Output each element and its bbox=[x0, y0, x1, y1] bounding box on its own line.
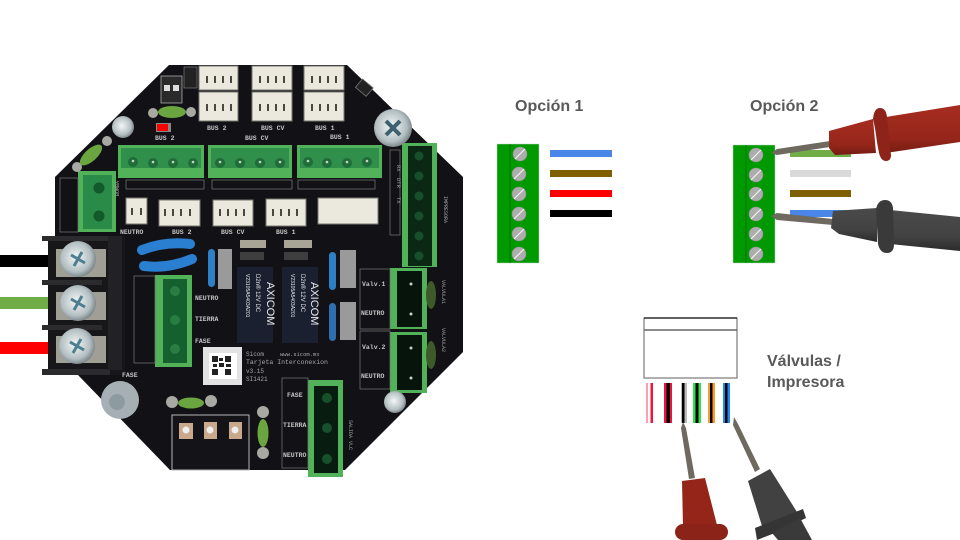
connector housing bbox=[644, 318, 737, 378]
silkscreen labels: BUS 1 bbox=[330, 134, 350, 141]
relay: left: AXICOM bbox=[264, 282, 276, 325]
red probe bbox=[675, 422, 728, 540]
silkscreen labels: DTR bbox=[395, 178, 402, 189]
silkscreen labels: SALIDA VLC bbox=[347, 420, 353, 450]
diagram: opción 2 terminal, wires and probes bbox=[733, 105, 960, 263]
silkscreen labels: Valv.1 bbox=[362, 281, 386, 288]
silkscreen labels: TIERRA bbox=[283, 422, 307, 429]
connectors: top white headers bbox=[199, 66, 344, 121]
coil: blue inductor bbox=[142, 243, 192, 267]
connector: green 4-pole row bbox=[118, 145, 382, 178]
silkscreen labels: BUS CV bbox=[221, 229, 245, 236]
qr label bbox=[203, 347, 242, 385]
small components: leds and regulators bbox=[240, 240, 312, 260]
resistors bbox=[208, 249, 336, 341]
label: válvulas / impresora: Válvulas / bbox=[767, 353, 841, 370]
silkscreen labels bbox=[115, 125, 448, 459]
silkscreen labels: NEUTRO bbox=[283, 452, 307, 459]
board outline bbox=[55, 65, 463, 470]
terminal block: power bbox=[42, 236, 125, 375]
silkscreen labels: NEUTRO bbox=[361, 310, 385, 317]
relay: right: V23105A5403A201 bbox=[289, 274, 295, 318]
silkscreen labels: BUS CV bbox=[245, 135, 269, 142]
silk outlines bbox=[60, 150, 400, 468]
relay: right bbox=[282, 267, 320, 343]
silkscreen labels: BUS CV bbox=[261, 125, 285, 132]
black probe bbox=[771, 200, 960, 253]
jumpers and small top parts bbox=[161, 67, 373, 103]
silkscreen labels: www.sicom.mx bbox=[280, 351, 320, 358]
screws bbox=[101, 109, 412, 419]
black probe bbox=[733, 417, 812, 540]
silkscreen labels: FASE bbox=[287, 392, 303, 399]
silkscreen labels: Valv.2 bbox=[362, 344, 386, 351]
label: válvulas / impresora: Impresora bbox=[767, 374, 844, 391]
silkscreen labels: BUS 2 bbox=[207, 125, 227, 132]
silkscreen labels: SI1421 bbox=[246, 376, 268, 383]
silkscreen labels: FASE bbox=[195, 338, 211, 345]
relay: left bbox=[237, 267, 276, 343]
silkscreen labels: BUS 2 bbox=[172, 229, 192, 236]
connector: green bomba bbox=[78, 171, 116, 232]
capacitors: gray bbox=[218, 249, 356, 340]
terminal: j7 bbox=[172, 415, 249, 470]
terminal strip bbox=[497, 144, 539, 263]
connector: green valvula 1 bbox=[390, 268, 427, 329]
terminal strip bbox=[733, 145, 775, 263]
fuses bbox=[72, 106, 436, 459]
silkscreen labels: Sicom bbox=[246, 351, 264, 358]
silkscreen labels: FASE bbox=[122, 372, 138, 379]
connectors: second row white headers bbox=[126, 198, 378, 226]
panel: circuit board bbox=[0, 65, 463, 477]
connector: green valvula 2 bbox=[390, 332, 427, 393]
connector: green neutro tierra fase bbox=[155, 275, 192, 367]
wires: power input bbox=[0, 255, 51, 354]
silkscreen labels: BUS 1 bbox=[276, 229, 296, 236]
wires bbox=[790, 150, 851, 217]
relay: left: V23105A5403A201 bbox=[244, 274, 250, 318]
diagram: opción 1 terminal and wires bbox=[497, 144, 612, 263]
silkscreen labels: RX bbox=[395, 165, 402, 172]
relay: right: AXICOM bbox=[308, 282, 320, 325]
silkscreen labels: TIERRA bbox=[195, 316, 219, 323]
silkscreen labels: IMPRESORA bbox=[442, 196, 448, 223]
led: red bbox=[156, 123, 171, 132]
silkscreen labels: TX bbox=[395, 197, 402, 204]
silkscreen labels: BOMBA bbox=[115, 181, 121, 196]
silkscreen labels: BUS 1 bbox=[315, 125, 335, 132]
silkscreen labels: v3.15 bbox=[246, 368, 264, 375]
silkscreen labels: VALVULA2 bbox=[440, 328, 446, 352]
red probe bbox=[771, 105, 960, 161]
connector: green salida vlc bbox=[308, 380, 343, 477]
silkscreen labels: VALVULA1 bbox=[440, 280, 446, 304]
connector: green impresora bbox=[402, 143, 437, 267]
silkscreen labels: Tarjeta Interconexion bbox=[246, 359, 328, 366]
heading: Opción 2: Opción 2 bbox=[750, 98, 819, 115]
wires bbox=[646, 383, 730, 423]
silkscreen labels: NEUTRO bbox=[120, 229, 144, 236]
silkscreen labels: NEUTRO bbox=[361, 373, 385, 380]
wires bbox=[550, 150, 612, 217]
relay: right: D2n® 12V DC bbox=[299, 274, 306, 313]
diagram: válvulas / impresora connector bbox=[644, 318, 812, 540]
silkscreen labels: BUS 2 bbox=[155, 135, 175, 142]
silkscreen labels: NEUTRO bbox=[195, 295, 219, 302]
heading: Opción 1: Opción 1 bbox=[515, 98, 584, 115]
relay: left: D2n® 12V DC bbox=[254, 274, 261, 313]
